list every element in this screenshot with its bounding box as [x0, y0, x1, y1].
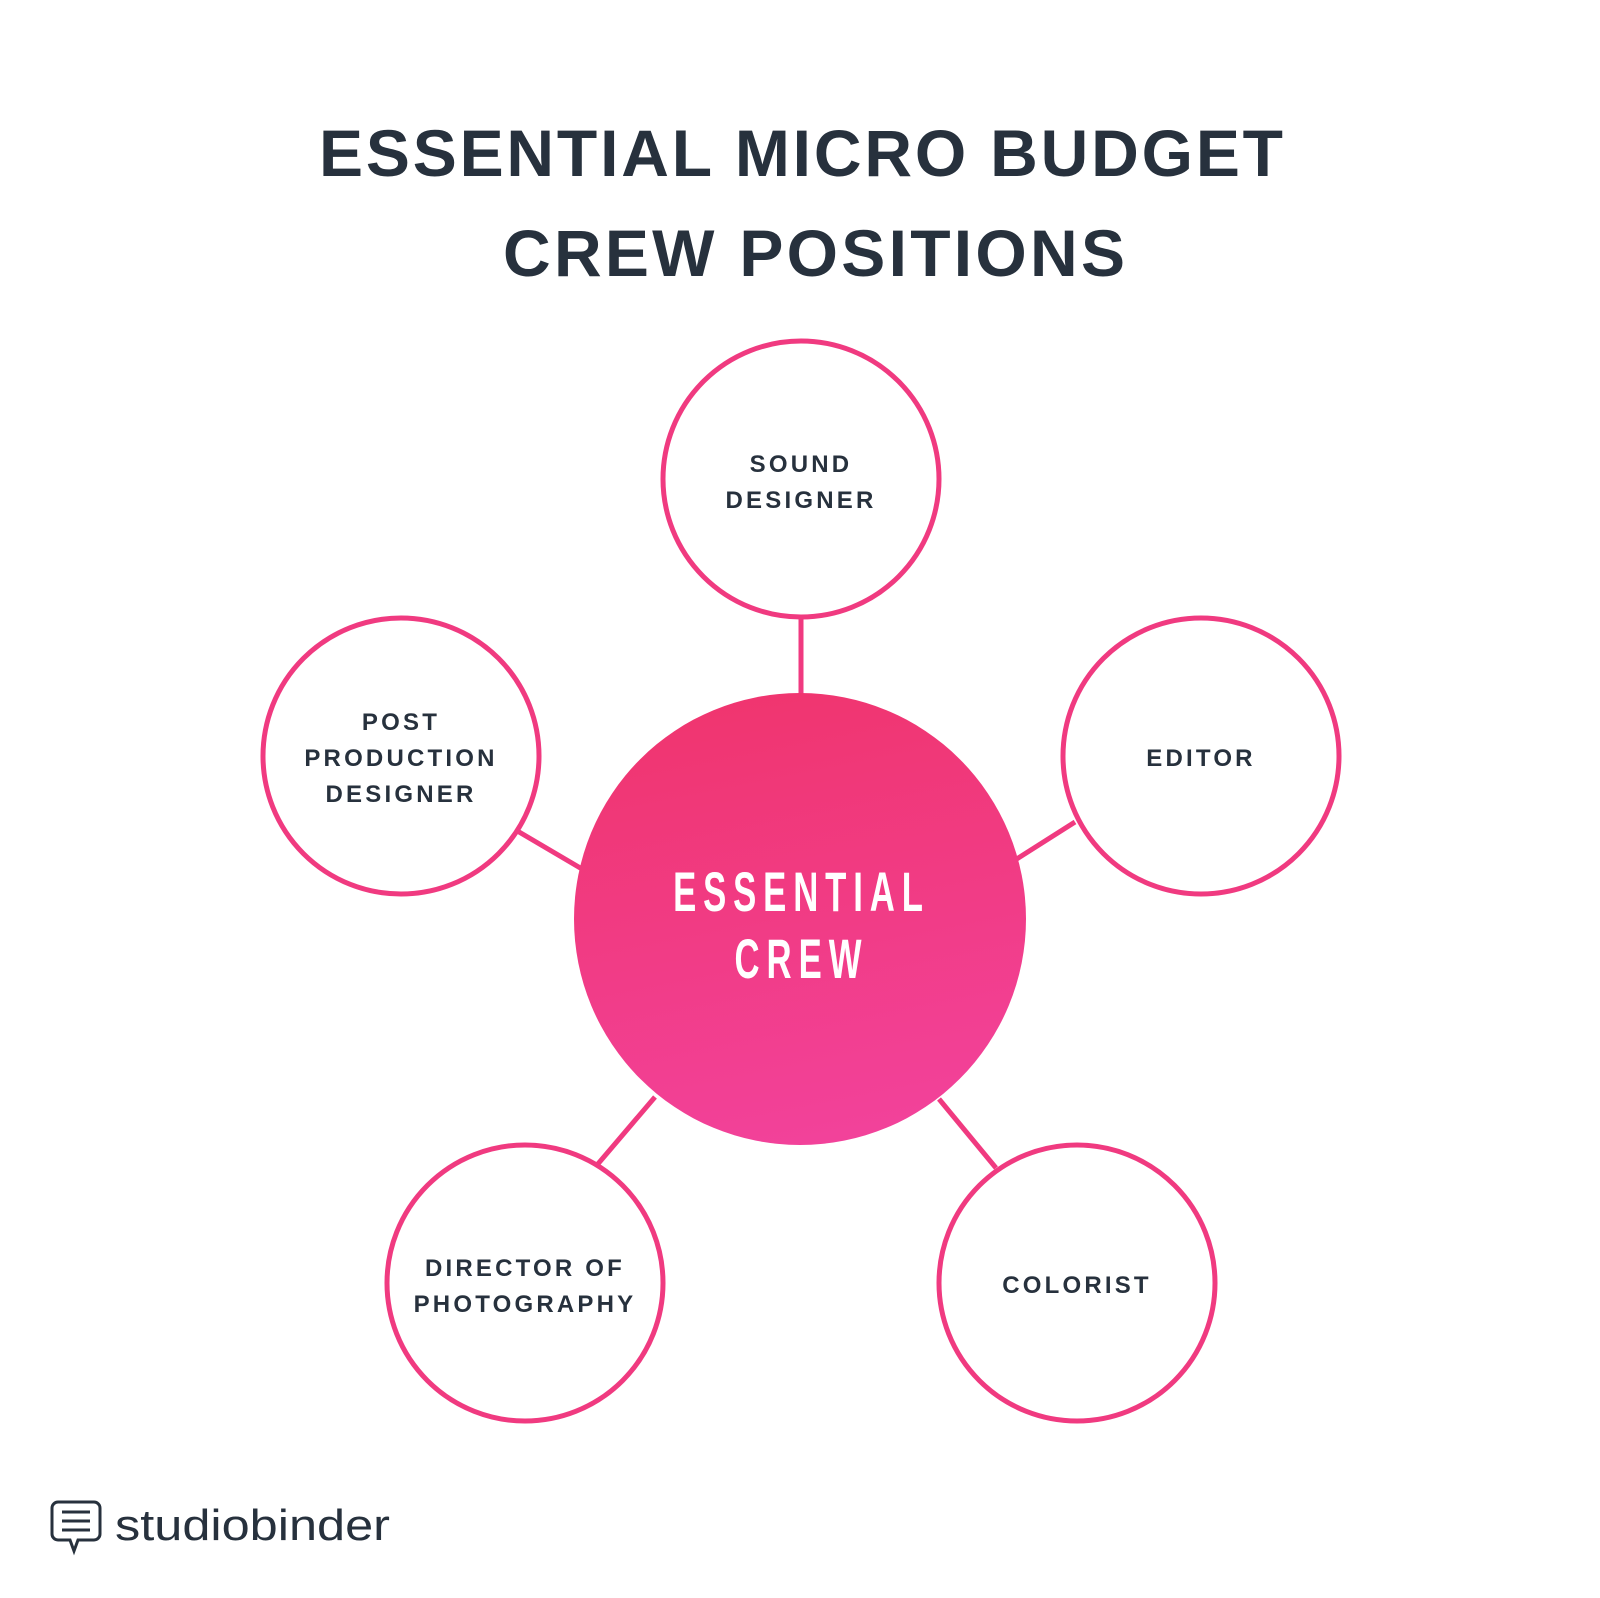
- circle: editor: [1063, 618, 1339, 894]
- circle: editor: EDITOR: [1146, 745, 1256, 772]
- circle: sound designer: [663, 341, 939, 617]
- circle: director of photography: DIRECTOR OF: [425, 1255, 625, 1282]
- circle: post production designer: PRODUCTION: [304, 745, 498, 772]
- circle: sound designer: DESIGNER: [726, 487, 876, 514]
- center circle: essential crew: ESSENTIAL: [673, 861, 923, 923]
- circle: post production designer: DESIGNER: [326, 781, 476, 808]
- logo: studiobinder: studiobinder: [115, 1501, 390, 1550]
- center circle: essential crew: CREW: [734, 928, 862, 990]
- circle: colorist: [939, 1145, 1215, 1421]
- title: [319, 116, 1283, 290]
- circle: director of photography: [387, 1145, 663, 1421]
- circle: sound designer: SOUND: [750, 451, 852, 478]
- circle: post production designer: [263, 618, 539, 894]
- circle: colorist: COLORIST: [1002, 1272, 1152, 1299]
- connectors: [514, 612, 1075, 1168]
- circle: director of photography: PHOTOGRAPHY: [414, 1291, 636, 1318]
- circle: post production designer: POST: [362, 709, 440, 736]
- center circle: essential crew: [574, 693, 1026, 1145]
- logo: studiobinder: [52, 1501, 390, 1551]
- title: CREW POSITIONS: [503, 216, 1125, 290]
- title: ESSENTIAL MICRO BUDGET: [319, 116, 1283, 190]
